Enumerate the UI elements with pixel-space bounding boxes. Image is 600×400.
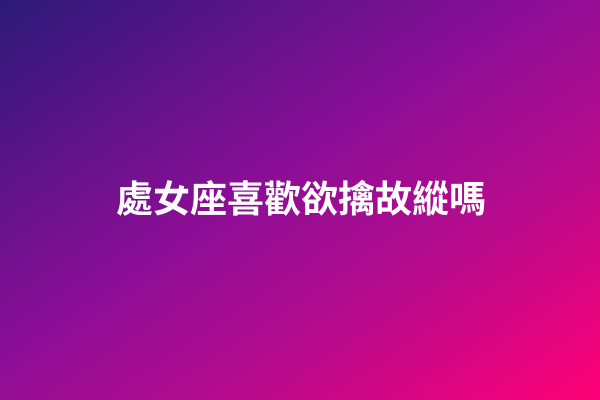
title: 處女座喜歡欲擒故縱嗎 — [116, 179, 486, 220]
